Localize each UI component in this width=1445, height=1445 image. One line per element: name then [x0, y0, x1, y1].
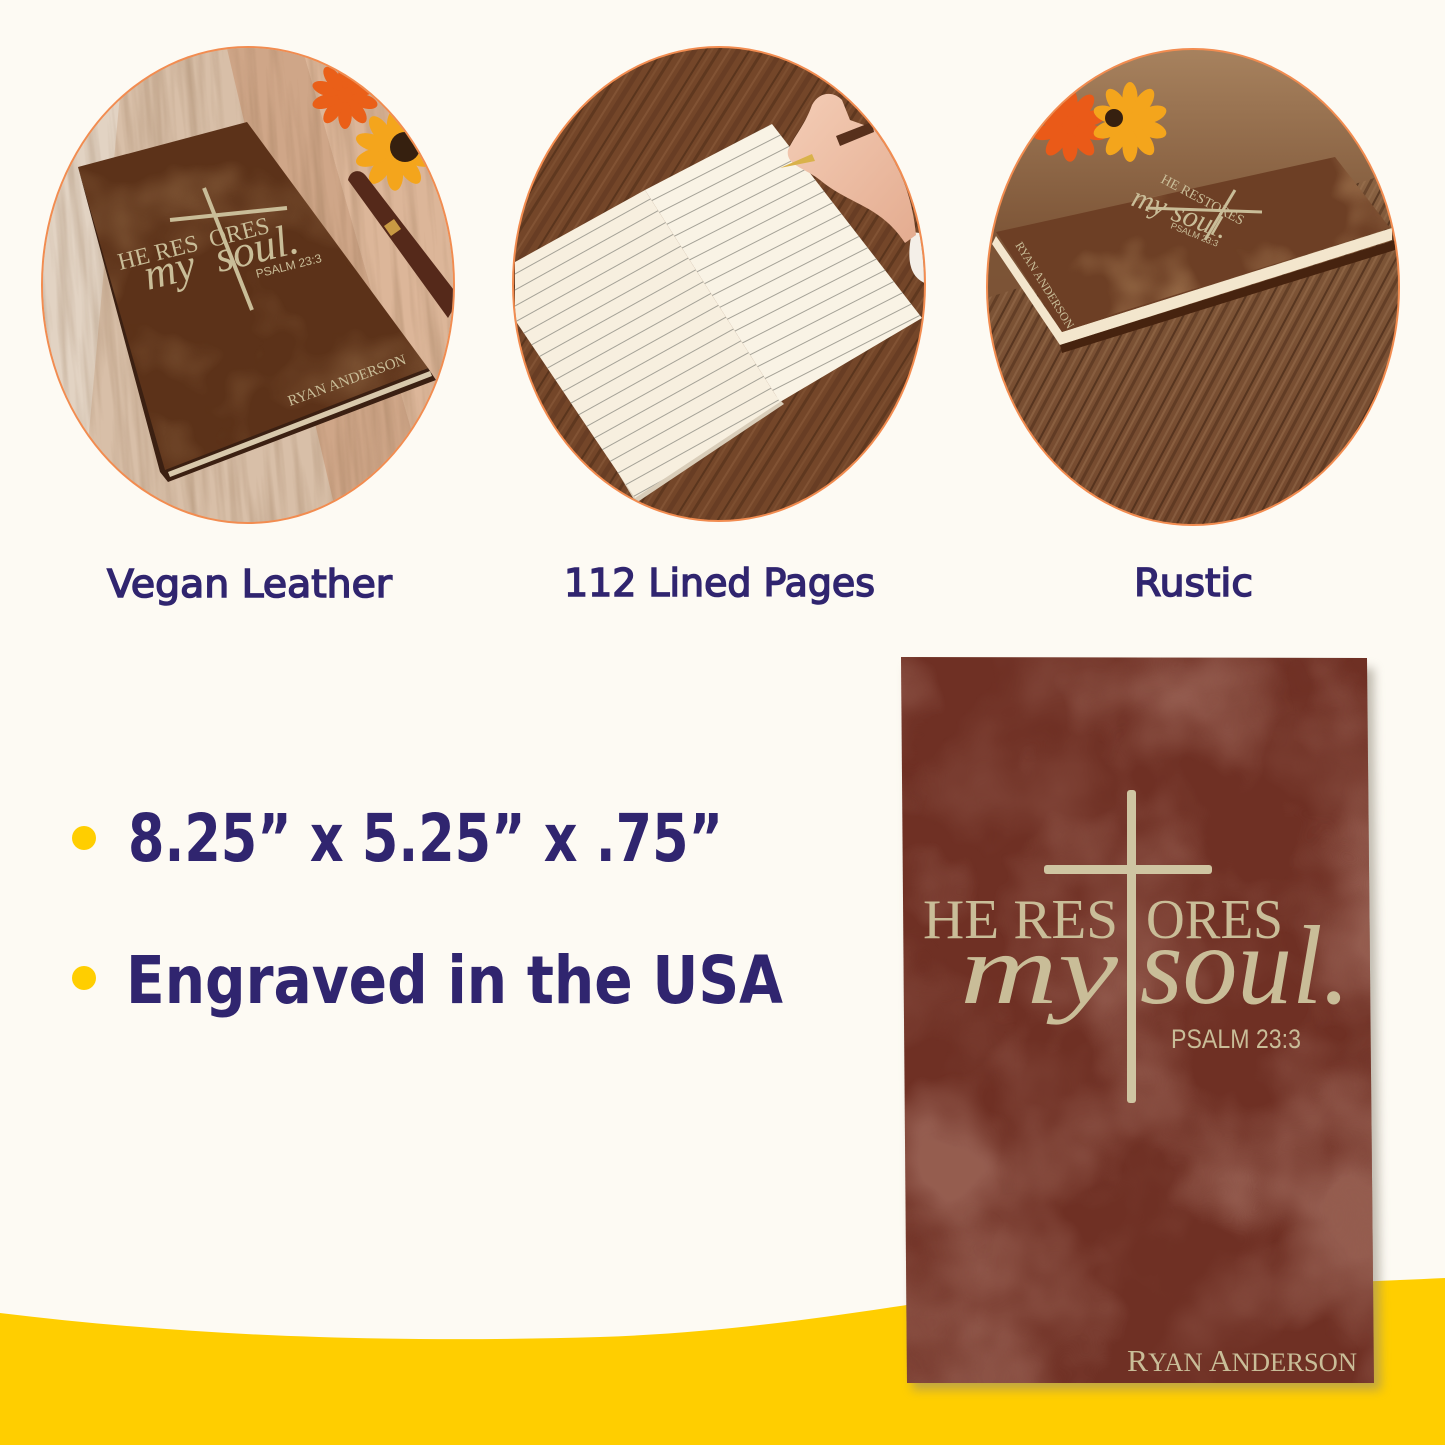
leather mottling — [895, 650, 1385, 1390]
engraving: HE RES ORES — [115, 213, 272, 276]
engraving: RYAN ANDERSON — [1012, 239, 1077, 331]
engraved title: HE RES — [923, 889, 1118, 951]
engraving: RYAN ANDERSON — [286, 352, 409, 410]
book pages — [992, 228, 1392, 345]
large journal cover: ORES — [1146, 889, 1283, 951]
engraving — [115, 188, 409, 410]
engraving: PSALM 23:3 — [1169, 221, 1220, 249]
caption: vegan leather: Vegan Leather — [107, 562, 392, 606]
yellow wave — [0, 1278, 1445, 1445]
cross — [1044, 790, 1212, 1103]
engraving: HE RESTORES — [1158, 172, 1246, 229]
flowers — [1032, 82, 1168, 162]
engraving: PSALM 23:3 — [254, 251, 323, 281]
photo: vegan leather journal — [41, 46, 455, 524]
caption: 112 lined pages: 112 Lined Pages — [564, 561, 875, 605]
large journal cover: soul. — [1140, 904, 1350, 1028]
book edge — [78, 167, 436, 482]
photo: lined pages — [500, 40, 935, 530]
bullet: dimensions: 8.25” x 5.25” x .75” — [128, 800, 723, 877]
engraved verse: PSALM 23:3 — [1171, 1024, 1301, 1054]
engraving: my soul. — [1128, 181, 1233, 246]
bullet: engraved in the USA: Engraved in the USA — [126, 942, 783, 1019]
engraved script: my — [960, 914, 1119, 1025]
pen — [348, 171, 460, 318]
book cover — [996, 157, 1390, 332]
engraving — [1012, 172, 1262, 331]
engraved name: RYAN ANDERSON — [1127, 1343, 1357, 1378]
large journal cover — [895, 650, 1385, 1390]
hand with pen — [780, 94, 935, 285]
engraving: my soul. — [139, 214, 303, 300]
flowers — [312, 66, 426, 191]
book cover — [78, 122, 428, 470]
ruled lines — [515, 124, 920, 497]
open notebook — [616, 396, 784, 501]
photo: rustic journal — [980, 40, 1410, 535]
caption: rustic: Rustic — [1134, 561, 1253, 605]
